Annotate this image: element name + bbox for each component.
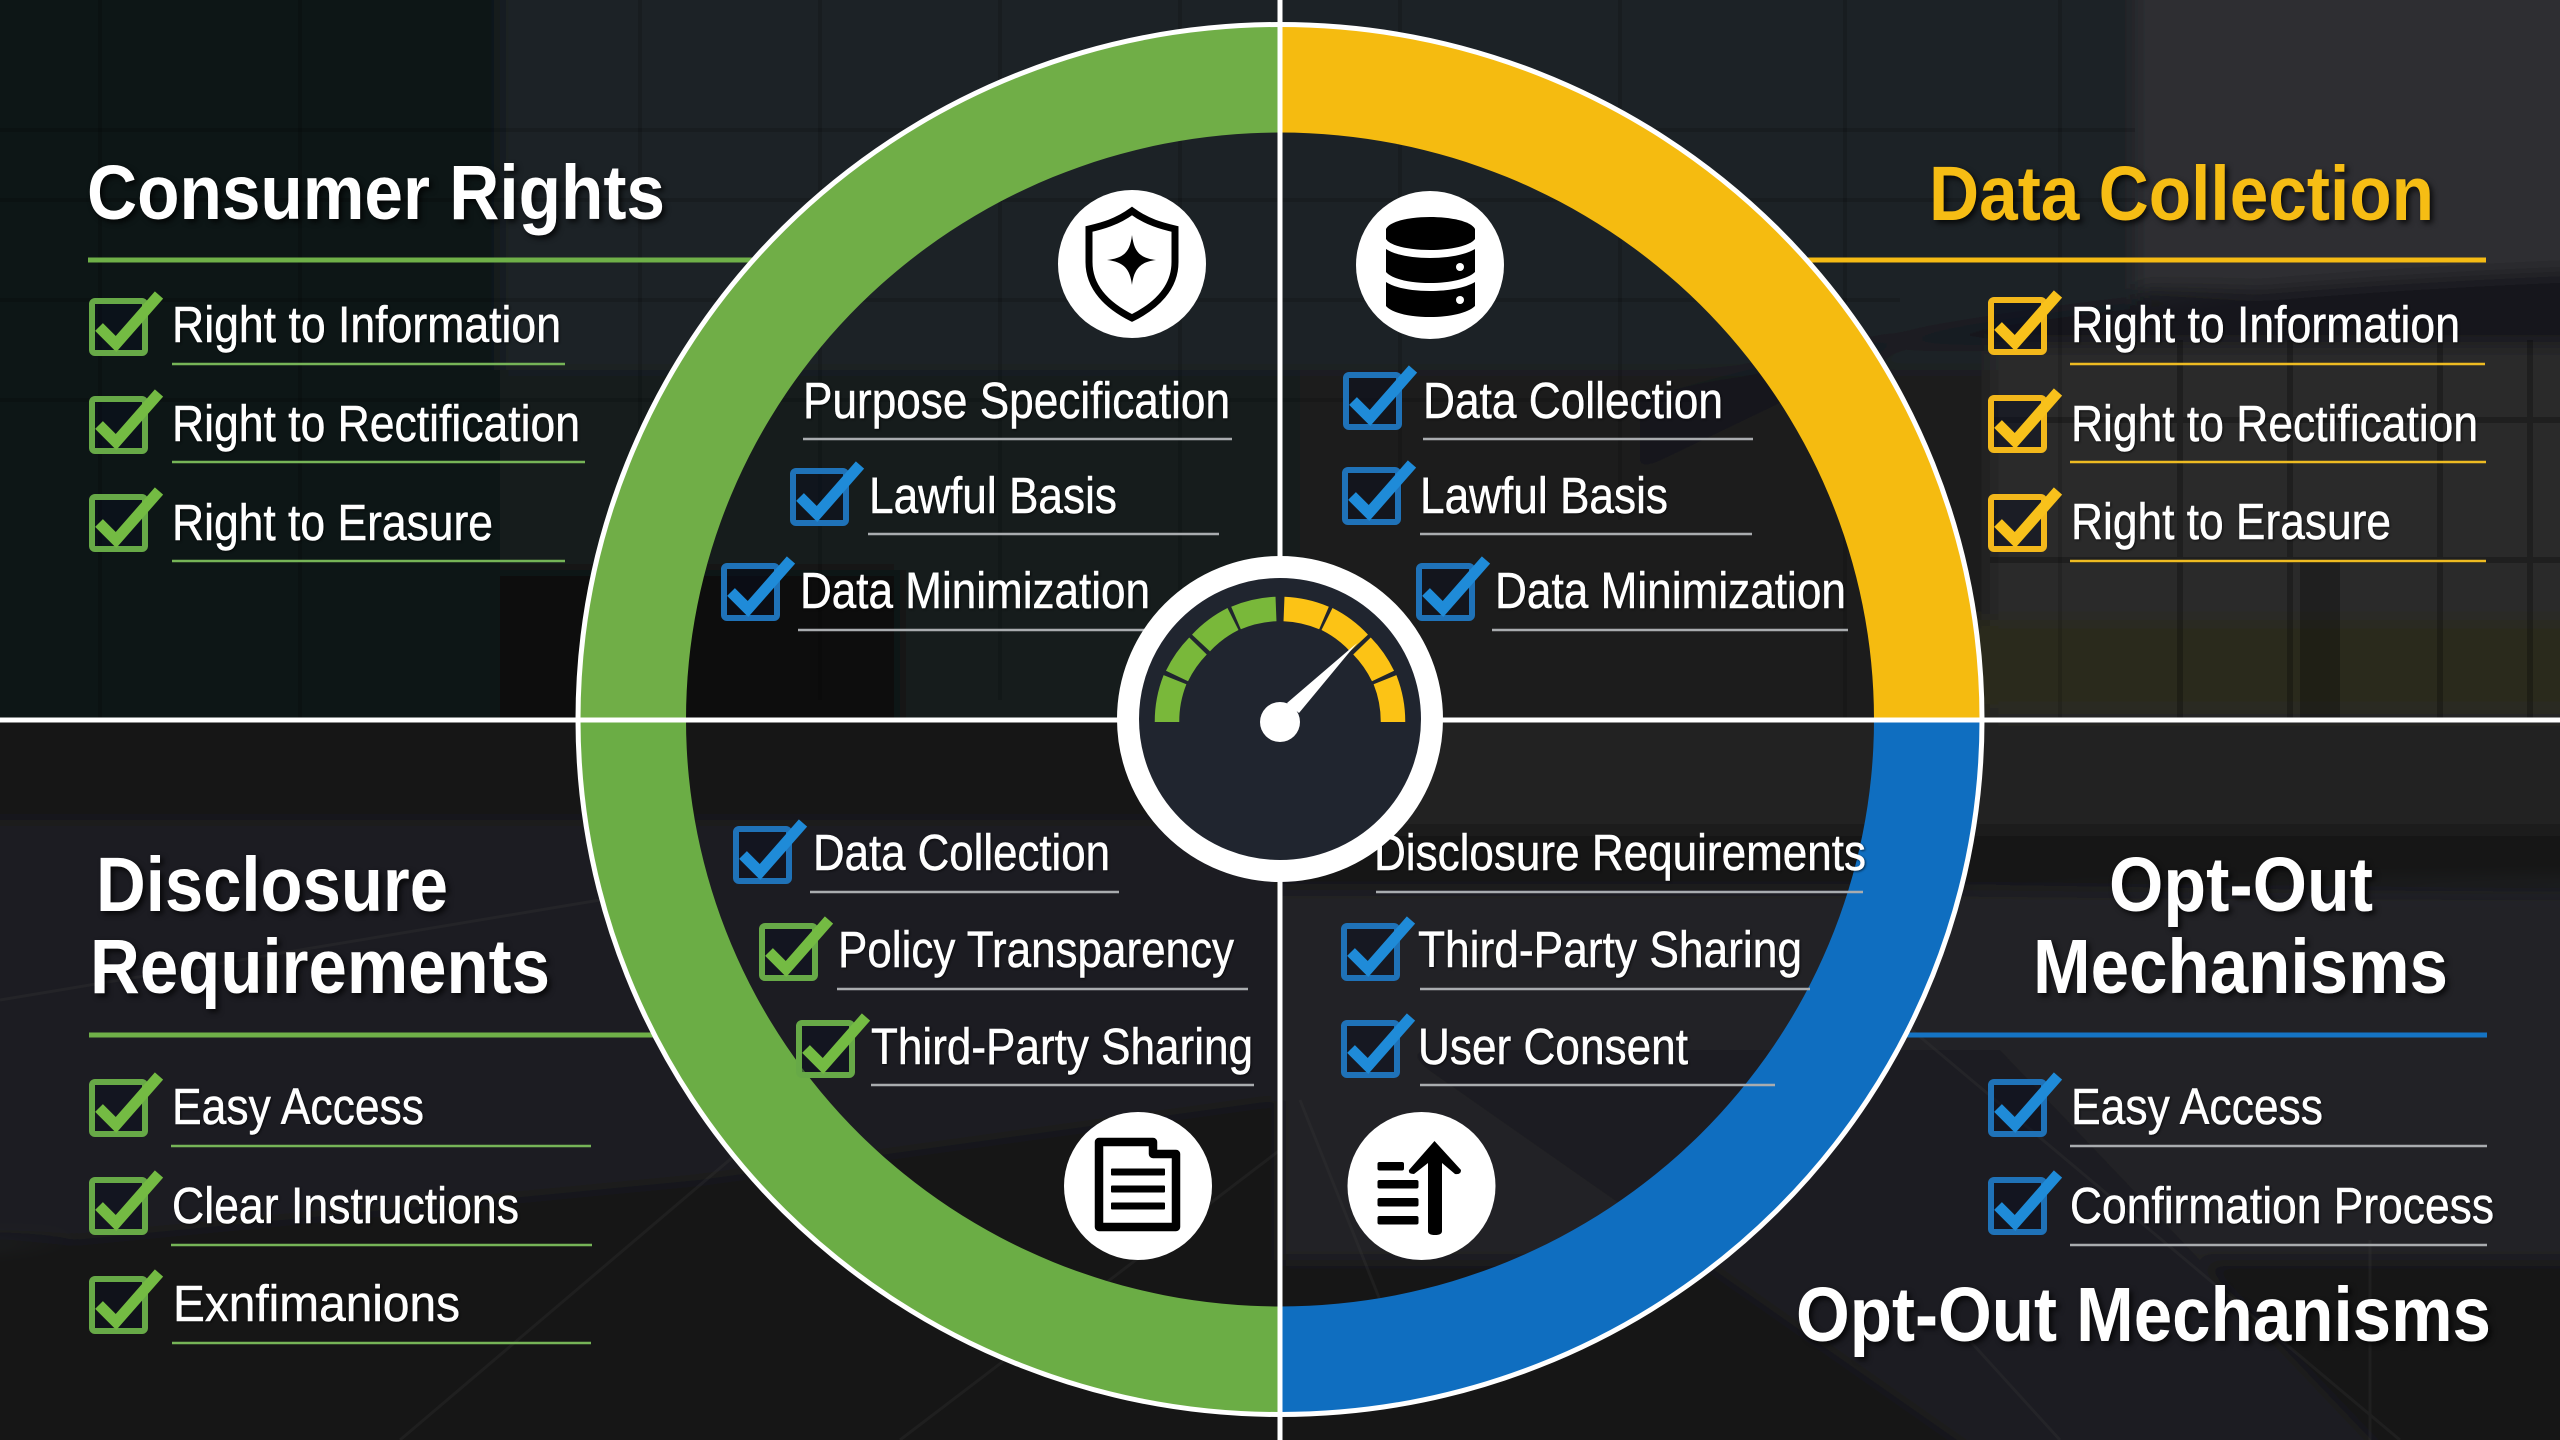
panel: opt-out mechanisms — [1796, 842, 2494, 1358]
item: clear instructions — [92, 1174, 592, 1245]
item: easy access — [92, 1076, 591, 1146]
item: right to rectification: Right to Rectification — [2071, 395, 2478, 452]
item: right to erasure: Right to Erasure — [2071, 493, 2391, 550]
heading: opt-out mechanisms: Mechanisms — [2033, 924, 2448, 1010]
item: right to erasure — [92, 491, 565, 561]
ring quadrant: top left green — [578, 24, 1280, 720]
item: user consent: User Consent — [1418, 1018, 1688, 1075]
icon: shield with star — [1058, 190, 1206, 338]
heading: disclosure requirements: Disclosure — [96, 842, 448, 928]
item: easy access: Easy Access — [172, 1078, 424, 1135]
item: right to erasure — [1991, 491, 2486, 561]
icon: database — [1356, 191, 1504, 339]
item: purpose specification: Purpose Specification — [803, 372, 1230, 429]
item: lawful basis: Lawful Basis — [1420, 467, 1668, 524]
item: third-party sharing: Third-Party Sharing — [871, 1018, 1253, 1075]
heading: disclosure requirements: Requirements — [90, 924, 550, 1010]
item: garbled third entry — [92, 1273, 591, 1343]
heading rule — [1880, 1032, 2487, 1038]
ring quadrant: bottom left green — [578, 720, 1280, 1414]
item: data minimization: Data Minimization — [800, 562, 1150, 619]
heading: consumer rights: Consumer Rights — [87, 150, 665, 236]
item: lawful basis — [793, 465, 1219, 534]
item: right to information: Right to Information — [172, 296, 561, 353]
item: data collection — [736, 823, 1119, 892]
item: lawful basis — [1345, 464, 1752, 534]
item: lawful basis: Lawful Basis — [869, 467, 1117, 524]
heading rule — [88, 258, 768, 262]
icon: document — [1064, 1112, 1212, 1260]
item: confirmation process — [1991, 1174, 2494, 1245]
item: third-party sharing — [799, 1017, 1254, 1085]
item: right to rectification — [1991, 392, 2486, 462]
item: garbled third entry: Exnfimanions — [173, 1275, 460, 1332]
gauge needle — [1260, 643, 1357, 742]
heading rule — [1780, 258, 2486, 262]
icon: list with up arrow — [1348, 1112, 1496, 1260]
panel: disclosure requirements — [89, 842, 679, 1343]
item: disclosure requirements: Disclosure Requirements — [1374, 824, 1866, 881]
panel: data collection — [1780, 151, 2486, 561]
heading: opt-out mechanisms: Opt-Out — [2109, 842, 2373, 928]
panel: opt-out items, bottom right of wheel — [1344, 824, 1866, 1085]
item: data collection — [1346, 369, 1753, 439]
gauge arc: green segments — [1167, 609, 1276, 722]
ring quadrant: top right yellow — [1280, 24, 1982, 720]
item: easy access — [1991, 1076, 2487, 1146]
item: clear instructions: Clear Instructions — [172, 1177, 519, 1234]
panel: consumer rights — [87, 150, 768, 561]
item: right to rectification — [92, 393, 585, 462]
item: user consent — [1344, 1017, 1775, 1085]
heading rule — [89, 1032, 679, 1038]
item: data minimization — [1419, 560, 1848, 630]
item: third-party sharing — [1344, 920, 1810, 989]
heading: opt-out mechanisms — [2033, 842, 2448, 1010]
item: right to rectification: Right to Rectification — [172, 395, 580, 452]
item: easy access: Easy Access — [2071, 1078, 2323, 1135]
item: right to erasure: Right to Erasure — [172, 494, 493, 551]
gauge: central speedometer — [1128, 567, 1432, 871]
item: right to information — [92, 295, 565, 364]
item: right to information — [1991, 294, 2485, 364]
gauge arc: yellow segments — [1284, 609, 1393, 722]
heading: opt-out mechanisms repeated: Opt-Out Mechanisms — [1796, 1272, 2491, 1358]
item: policy transparency — [762, 920, 1248, 989]
item: data collection: Data Collection — [1423, 372, 1723, 429]
item: policy transparency: Policy Transparency — [838, 921, 1234, 978]
item: data minimization — [724, 560, 1150, 630]
panel: disclosure items, bottom left of wheel — [736, 823, 1254, 1085]
ring quadrant: bottom right blue — [1280, 720, 1982, 1414]
item: confirmation process: Confirmation Process — [2070, 1177, 2494, 1234]
heading: disclosure requirements — [90, 842, 550, 1010]
item: data minimization: Data Minimization — [1495, 562, 1846, 619]
panel: data items, top right of wheel — [1345, 369, 1848, 630]
item: right to information: Right to Information — [2071, 296, 2460, 353]
item: data collection: Data Collection — [813, 824, 1110, 881]
panel: purpose items, top left of wheel — [724, 372, 1232, 630]
heading: data collection: Data Collection — [1929, 151, 2434, 237]
item: third-party sharing: Third-Party Sharing — [1418, 921, 1802, 978]
